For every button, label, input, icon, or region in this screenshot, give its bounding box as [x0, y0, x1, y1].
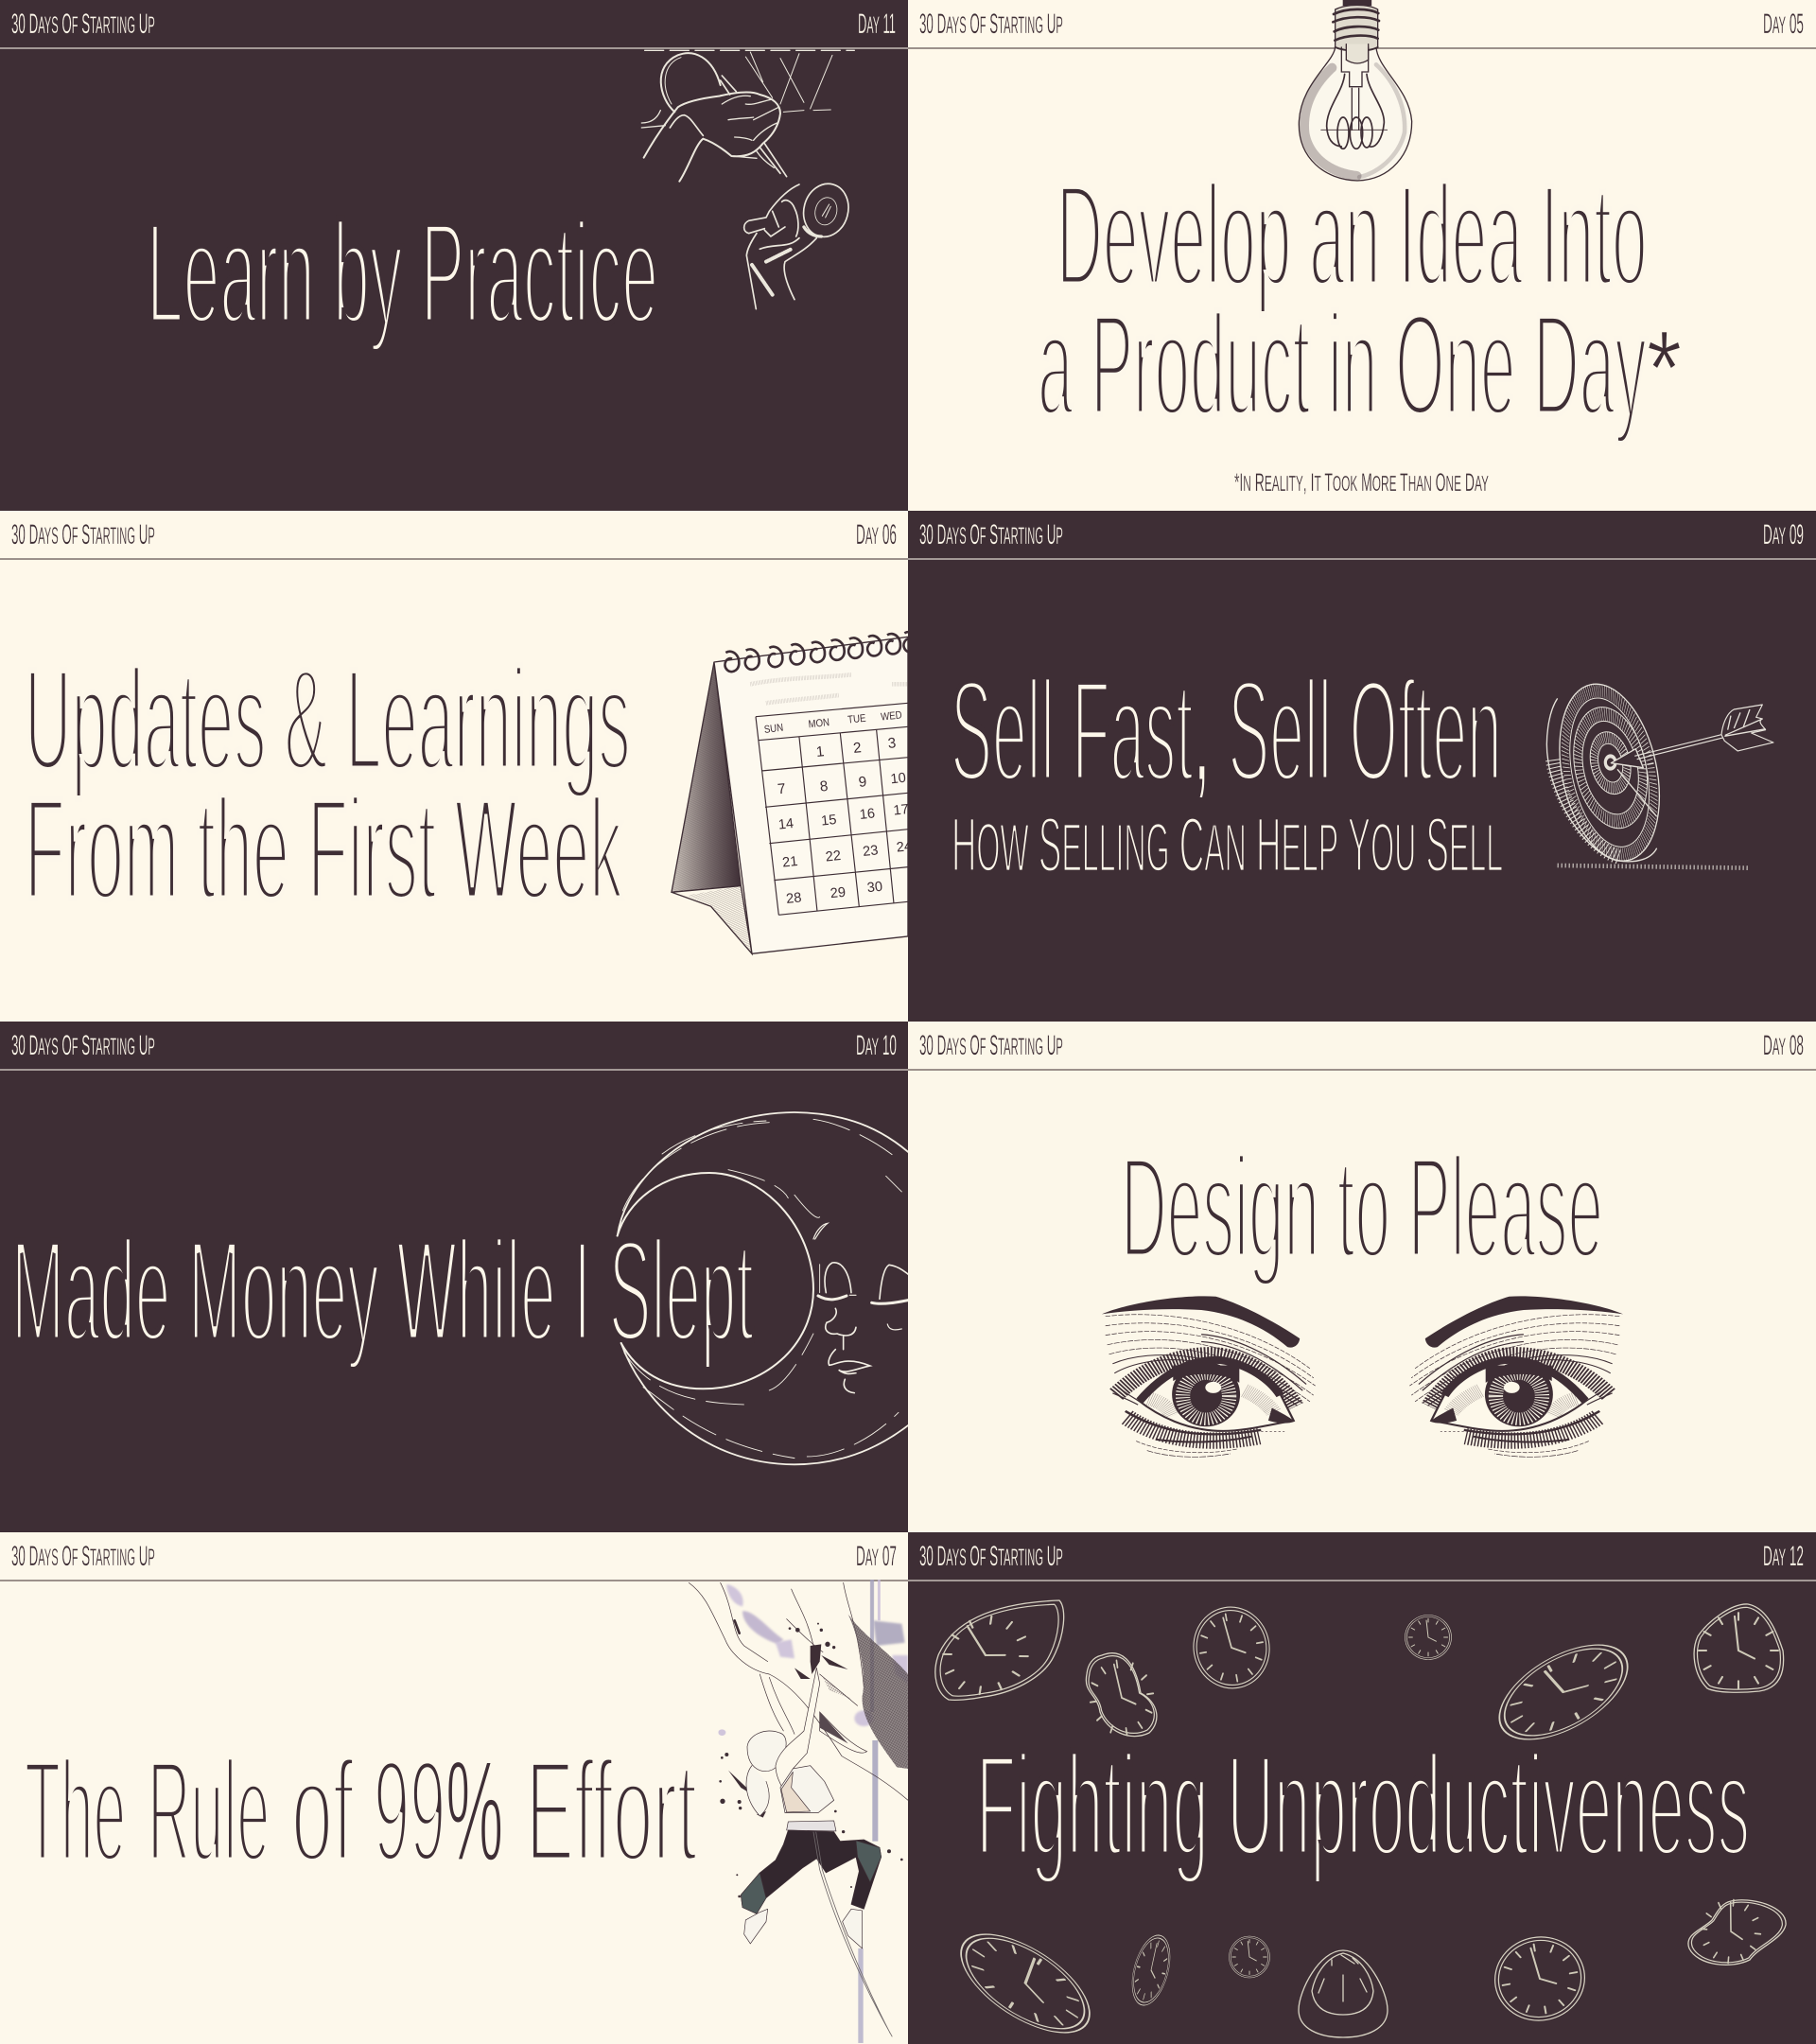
calendar dates: 10 — [890, 771, 907, 787]
header label: 30 DAYS OF STARTING UP — [919, 1029, 1063, 1060]
title: of — [291, 1731, 354, 1892]
calendar dates: 1 — [815, 743, 825, 760]
calendar dates: 21 — [781, 854, 798, 871]
calendar dates — [763, 709, 913, 907]
clock 1 — [930, 1600, 1064, 1708]
divider line — [908, 1580, 1816, 1581]
climber figure — [741, 1668, 882, 1948]
header label: 30 DAYS OF STARTING UP — [11, 1029, 155, 1060]
calendar dates: 17 — [893, 802, 910, 819]
clock 4 — [1406, 1616, 1451, 1659]
raised arm — [776, 1668, 820, 1790]
dark leggings — [741, 1830, 882, 1913]
header label: 30 DAYS OF STARTING UP — [11, 1540, 155, 1571]
calendar dates: 30 — [866, 880, 883, 896]
icon: desk calendar — [672, 632, 917, 953]
panel: Day 06 Updates and Learnings — [0, 511, 917, 1022]
calendar dates: 14 — [777, 816, 794, 833]
panel: Day 05 Develop an Idea — [908, 0, 1816, 512]
header label: 30 DAYS OF STARTING UP — [11, 8, 155, 39]
calendar dates: 9 — [858, 774, 867, 791]
footnote: *IN REALITY, IT TOOK MORE THAN ONE DAY — [1234, 468, 1489, 497]
calendar dates: 15 — [820, 812, 837, 830]
calendar dates: 2 — [852, 740, 863, 757]
ink splatter — [719, 1623, 903, 1897]
ground shadow — [1558, 865, 1748, 868]
divider line — [908, 47, 1816, 49]
calendar dates: TUE — [847, 712, 866, 726]
dark rock texture — [820, 1615, 908, 1769]
watercolor washes — [718, 1580, 908, 2043]
clock 8 — [1126, 1931, 1177, 2009]
title line 1: Develop an Idea Into — [1056, 155, 1648, 316]
clock 7 — [945, 1915, 1106, 2044]
divider line — [0, 1069, 908, 1071]
title — [25, 639, 631, 930]
icon: crescent moon with face — [618, 1112, 924, 1464]
calendar dates: MON — [808, 716, 830, 731]
icon: engraved left eye — [1102, 1296, 1316, 1457]
divider line — [908, 1069, 1816, 1071]
clock 12 — [1688, 1897, 1786, 1965]
title: Design to Please — [1121, 1127, 1603, 1288]
title — [1038, 155, 1682, 445]
clock 6 — [1694, 1604, 1784, 1692]
rock outlines — [689, 1582, 908, 1800]
calendar dates: 8 — [819, 778, 829, 795]
hair — [746, 1731, 786, 1816]
asterisk: * — [1647, 310, 1682, 428]
day label: DAY 11 — [858, 8, 896, 39]
filament — [1321, 44, 1388, 148]
clock 9 — [1230, 1936, 1269, 1978]
target body — [1545, 674, 1674, 870]
divider line — [0, 558, 908, 560]
sleeping face — [818, 1263, 911, 1393]
title: 99% — [374, 1731, 503, 1892]
title — [25, 1731, 697, 1892]
day label: DAY 10 — [856, 1029, 897, 1060]
clock 5 — [1484, 1626, 1643, 1758]
calendar dates: 3 — [887, 735, 897, 752]
calendar dates: 29 — [829, 885, 847, 901]
subtitle: HOW SELLING CAN HELP YOU SELL — [952, 802, 1503, 888]
icon: target with arrow — [1545, 674, 1773, 870]
header label: 30 DAYS OF STARTING UP — [11, 518, 155, 550]
header label: 30 DAYS OF STARTING UP — [919, 1540, 1063, 1571]
panel: Day 11 Learn by Practice — [0, 0, 908, 512]
arrow — [1611, 705, 1773, 768]
calendar front page — [714, 637, 908, 953]
calendar dates: 7 — [777, 780, 787, 797]
bulb socket — [1333, 0, 1379, 51]
calendar dates: 23 — [862, 843, 879, 860]
calendar dates: WED — [881, 709, 903, 724]
title: Learn by Practice — [147, 193, 658, 354]
day label: DAY 06 — [856, 518, 897, 550]
title: Sell Fast, Sell Often — [951, 651, 1502, 812]
bulb glass — [1299, 47, 1412, 181]
panel: Day 09 Sell Fast — [908, 511, 1816, 1022]
clock 2 — [1085, 1653, 1159, 1739]
divider line — [0, 1580, 908, 1581]
title: The — [25, 1731, 126, 1892]
shoes — [744, 1909, 768, 1944]
torso — [780, 1766, 834, 1813]
header label: 30 DAYS OF STARTING UP — [919, 518, 1063, 550]
calendar dates: 28 — [785, 890, 802, 907]
calendar stand back — [672, 662, 752, 953]
illustration: rock climber — [689, 1580, 908, 2043]
panel: Day 08 Design to Please — [908, 1022, 1816, 1533]
title line 1: Updates & Learnings — [25, 639, 631, 800]
title line 2: From the First Week — [25, 769, 623, 930]
day label: DAY 12 — [1763, 1540, 1804, 1571]
divider line — [0, 47, 908, 49]
day label: DAY 07 — [856, 1540, 897, 1571]
day label: DAY 05 — [1763, 8, 1804, 39]
calendar dates: 22 — [825, 848, 842, 865]
title: Effort — [526, 1731, 697, 1892]
spiral binding — [725, 632, 917, 672]
icon: sketched hands with hoop and cup — [641, 50, 854, 309]
clock 10 melted dome — [1299, 1950, 1388, 2037]
rope — [813, 1832, 892, 2036]
crescent outlines — [618, 1112, 924, 1464]
icon: light bulb — [1299, 0, 1412, 181]
calendar dates: 24 — [896, 839, 913, 856]
title: Fighting Unproductiveness — [976, 1724, 1750, 1886]
panel: Day 12 Fighting Unproductiveness — [908, 1532, 1816, 2044]
panel: Day 07 Rule of 99% — [0, 1532, 908, 2044]
clock 3 — [1187, 1601, 1276, 1694]
icon: engraved right eye — [1409, 1296, 1623, 1457]
calendar dates: 16 — [859, 806, 876, 823]
title: Made Money While I Slept — [11, 1211, 754, 1371]
day label: DAY 09 — [1763, 518, 1804, 550]
calendar dates: SUN — [763, 722, 784, 736]
title line 2: a Product in One Day — [1038, 285, 1647, 445]
day label: DAY 08 — [1763, 1029, 1804, 1060]
panel: Day 10 Made Money — [0, 1022, 924, 1533]
header label: 30 DAYS OF STARTING UP — [919, 8, 1063, 39]
melting clocks — [930, 1600, 1786, 2044]
harness — [787, 1821, 836, 1831]
title: Rule — [148, 1731, 270, 1892]
clock 11 — [1489, 1930, 1591, 2028]
divider line — [908, 558, 1816, 560]
